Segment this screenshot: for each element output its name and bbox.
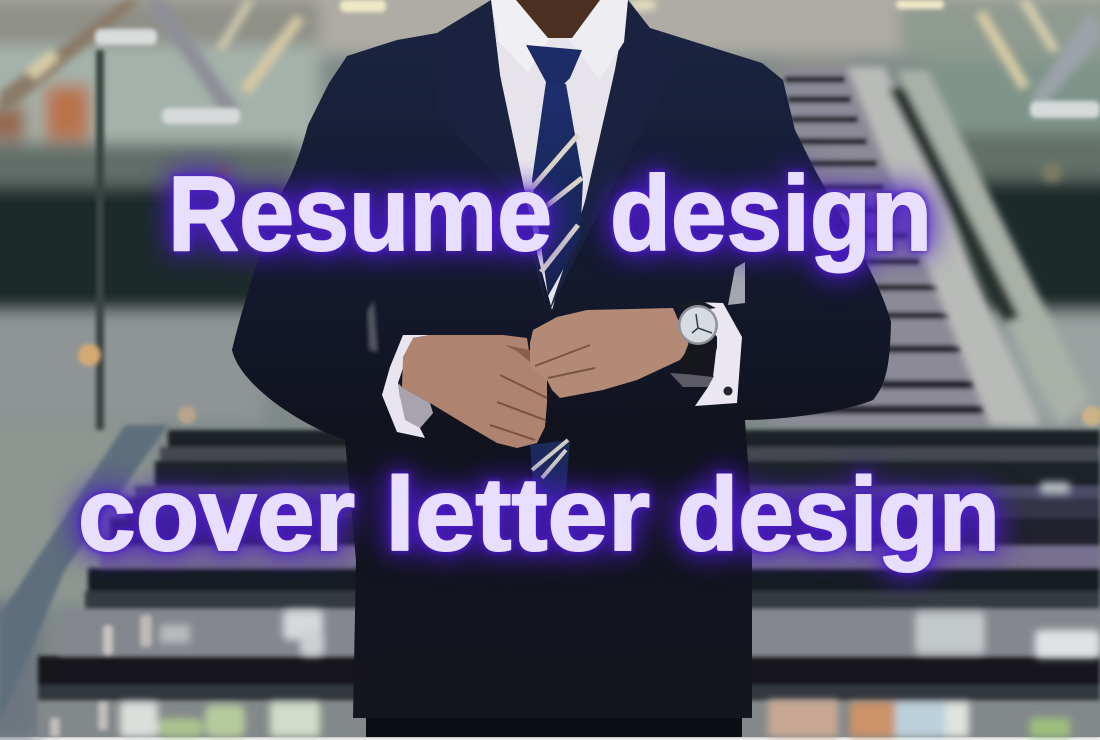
foreground stairs [38,430,1100,737]
collar [491,0,550,72]
heading: cover letter design: cover [78,457,355,573]
shirt [491,0,628,310]
upper stairs, right [745,68,1010,425]
jacket [232,0,891,718]
heading: Resume design [168,155,932,273]
neck [516,0,600,38]
diagonal balustrades, right [847,67,1090,425]
trousers [366,715,742,737]
man in navy suit [232,0,891,737]
heading: Resume design: Resume [168,155,552,273]
arm gaps [367,300,378,352]
heading: Resume design: design [610,155,932,273]
cufflink [724,386,732,396]
watch [675,300,718,377]
left cuff [382,335,433,438]
handrail [0,425,168,722]
tie [526,45,583,510]
heading: cover letter design [78,457,1000,573]
lapels [434,0,547,312]
heading: cover letter design: letter [385,457,650,573]
right shirt cuff [693,302,742,406]
right hand [530,308,690,398]
left hand [402,335,547,448]
heading: cover letter design: design [677,457,1000,573]
